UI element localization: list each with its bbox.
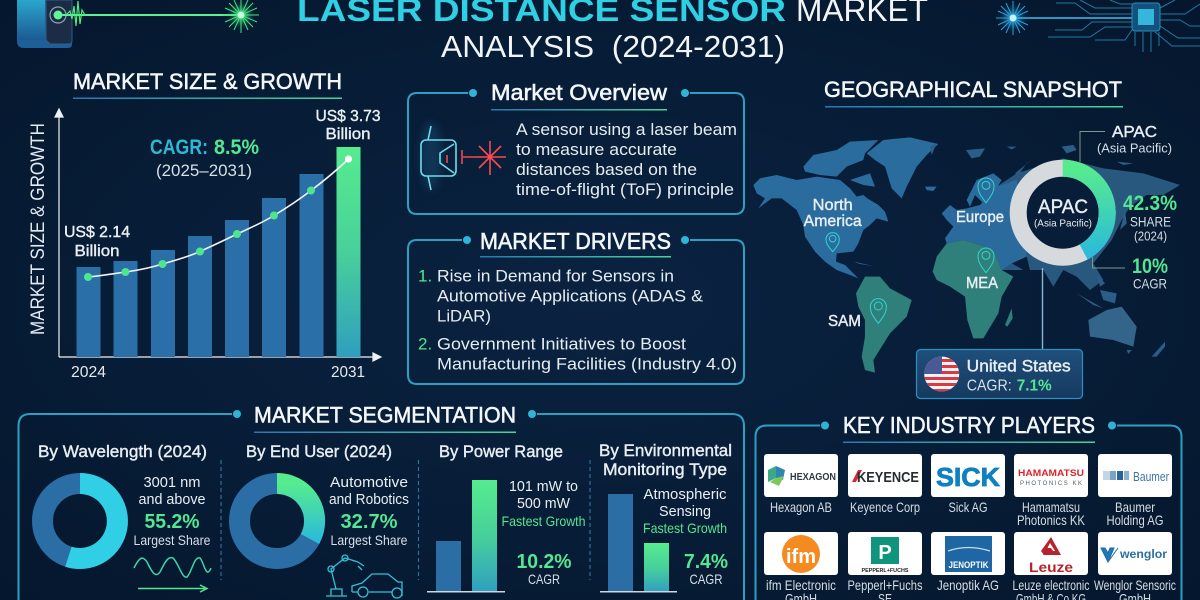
segment: by wavelength: and above: [138, 491, 206, 508]
label: Jenoptik AG: Jenoptik AG: [937, 577, 999, 593]
label: Baumer: [1106, 499, 1164, 528]
icon: robot arm and car: [326, 555, 402, 598]
pins: [826, 178, 994, 323]
driver 1: 1.: [418, 266, 432, 286]
segment: by power range: 500 mW: [517, 495, 571, 512]
logo: Sick: SICK: [936, 462, 1000, 492]
heading: market drivers: MARKET DRIVERS: [480, 228, 671, 254]
driver 1: [418, 266, 704, 326]
donut: wavelength: [42, 484, 118, 558]
text: overview description: A sensor using a laser beam: [516, 120, 737, 139]
label: Baumer: Holding AG: [1106, 512, 1164, 528]
region labels: [804, 197, 1004, 330]
segment: by power range: 101 mW to: [509, 478, 578, 495]
CAGR stat: CAGR: [1133, 276, 1167, 292]
world map: americas: [753, 137, 938, 373]
segment: by environmental monitoring type: Atmospheric: [644, 486, 727, 503]
segment: by wavelength: By Wavelength (2024): [38, 443, 207, 461]
axis years: [71, 364, 365, 381]
callout: United States: 7.1%: [1017, 378, 1052, 394]
logo: Pepperl+Fuchs: [848, 532, 922, 575]
label: Hamamatsu: [1017, 499, 1086, 528]
logo: Pepperl+Fuchs: P: [878, 542, 892, 564]
heading: market segmentation: MARKET SEGMENTATION: [254, 402, 516, 428]
logo: Sick: [931, 454, 1005, 497]
icon: circuit chip with cyan star: [996, 0, 1200, 52]
bar chart: environmental: [600, 494, 677, 592]
label: CAGR: 8.5%: [214, 136, 259, 159]
logo: Pepperl+Fuchs: PEPPERL+FUCHS: [862, 568, 909, 574]
panel: key industry players: [756, 412, 1182, 600]
label: Pepperl+Fuchs: [848, 577, 922, 600]
panel: market size and growth: [28, 69, 381, 381]
segment: by end user: and Robotics: [329, 491, 409, 508]
donut: APAC share: (Asia Pacific): [1034, 218, 1092, 230]
label: Sick AG: Sick AG: [948, 499, 988, 515]
text: overview description: [516, 120, 737, 199]
logo: Keyence: [848, 454, 922, 497]
logo: Hamamatsu: [1014, 454, 1088, 497]
CAGR stat: 10%: [1132, 255, 1168, 278]
logo: Hamamatsu: HAMAMATSU: [1018, 468, 1084, 479]
segment: by environmental monitoring type: Monitoring Type: [603, 461, 727, 479]
panel: market overview: [408, 80, 744, 214]
callout: United States: [916, 350, 1082, 398]
icon: US flag: [924, 356, 960, 392]
donut: APAC share: APAC: [1038, 197, 1088, 218]
label: Leuze electronic: [1012, 577, 1090, 600]
APAC callout: (Asia Pacific): [1097, 140, 1172, 156]
label: 2031 value: Billion: [326, 126, 370, 143]
logo: Leuze: Leuze: [1029, 559, 1073, 575]
share stat: 42.3%: [1123, 192, 1177, 215]
label: 2024 value: US$ 2.14: [64, 224, 130, 241]
segment: by power range: By Power Range: [439, 443, 563, 461]
label: Pepperl+Fuchs: Pepperl+Fuchs: [848, 577, 922, 593]
callout: United States: CAGR:: [967, 378, 1012, 394]
panel: market drivers: [408, 228, 744, 384]
segment: by end user: 32.7%: [340, 511, 398, 533]
heading: market size: MARKET SIZE & GROWTH: [73, 69, 342, 94]
icon: wave and arrow: [134, 558, 211, 592]
segment: by power range: Fastest Growth: [502, 513, 586, 529]
text: overview description: to measure accurate: [516, 140, 677, 159]
label: Hamamatsu: Photonics KK: [1017, 512, 1086, 528]
logo: Baumer: Baumer: [1133, 470, 1169, 484]
label: ifm Electronic: [766, 577, 836, 600]
segment: by end user: Automotive: [330, 474, 408, 491]
title: ANALYSIS (2024-2031): [441, 29, 785, 64]
segment: by environmental monitoring type: 7.4%: [684, 551, 728, 573]
icon: laser sensor with beam: [17, 0, 259, 48]
bar chart: power range: [427, 480, 505, 592]
icon: laser sensor: [420, 122, 506, 190]
label: CAGR: [150, 136, 259, 180]
logo: ifm: [764, 532, 838, 575]
segment: by end user: [240, 443, 409, 598]
region labels: SAM: [828, 313, 861, 330]
logo: Keyence: KEYENCE: [857, 469, 919, 486]
segment: by end user: By End User (2024): [246, 443, 392, 461]
label: 2024 value: Billion: [74, 243, 120, 260]
text: overview description: distances based on the: [516, 160, 697, 179]
segment: by environmental monitoring type: Fastest Growth: [643, 520, 727, 536]
label: Baumer: Baumer: [1115, 499, 1155, 515]
world map: eastern hemisphere: [930, 143, 1180, 357]
APAC callout: APAC: [1112, 124, 1157, 141]
label: Keyence Corp: Keyence Corp: [850, 499, 920, 515]
driver 1: Rise in Demand for Sensors in: [437, 266, 674, 286]
segment: by end user: Largest Share: [330, 532, 408, 548]
share stat: (2024): [1134, 228, 1167, 244]
region labels: North: [813, 197, 853, 214]
CAGR stat: [1132, 255, 1168, 292]
label: Hamamatsu: Hamamatsu: [1022, 499, 1080, 515]
callout: United States: United States: [967, 358, 1071, 376]
logo: Leuze: [1014, 532, 1088, 575]
label: Leuze electronic: Leuze electronic: [1012, 577, 1090, 593]
logo: Hamamatsu: PHOTONICS KK: [1020, 481, 1082, 487]
label: Wenglor Sensoric: [1094, 577, 1176, 600]
segment: by environmental monitoring type: [599, 442, 732, 592]
axis years: 2024: [71, 364, 106, 381]
driver 1: LiDAR): [437, 306, 491, 326]
driver 1: Automotive Applications (ADAS &: [437, 286, 704, 306]
connector lines: [1042, 132, 1125, 349]
label: 2031 value: [316, 108, 381, 143]
label: CAGR: (2025–2031): [156, 162, 252, 180]
share stat: SHARE: [1130, 214, 1171, 230]
segment: by wavelength: 55.2%: [144, 511, 200, 533]
region labels: Europe: [956, 209, 1004, 226]
region labels: America: [804, 213, 862, 230]
driver 2: Government Initiatives to Boost: [437, 334, 686, 354]
title: [297, 0, 928, 64]
label: CAGR: CAGR:: [150, 136, 208, 159]
logo: Hexagon: HEXAGON: [790, 471, 836, 483]
logo: Baumer: [1098, 454, 1172, 497]
heading: key industry players: KEY INDUSTRY PLAYERS: [843, 412, 1095, 438]
panel: market segmentation: [18, 402, 744, 600]
text: overview description: time-of-flight (ToF) principle: [516, 180, 734, 199]
driver 2: 2.: [418, 334, 432, 354]
label: Hexagon AB: Hexagon AB: [770, 499, 832, 515]
region labels: MEA: [966, 275, 999, 292]
bar chart: market size 2024 to 2031: [55, 109, 381, 361]
label: ifm Electronic: ifm Electronic: [766, 577, 836, 593]
share stat: [1123, 192, 1177, 244]
label: 2031 value: US$ 3.73: [316, 108, 381, 125]
logo: ifm: ifm: [786, 546, 816, 568]
logo: Wenglor: wenglor: [1119, 547, 1167, 561]
label: 2024 value: [64, 224, 130, 260]
heading: geographical snapshot: GEOGRAPHICAL SNAPSHOT: [824, 77, 1122, 102]
driver 2: [418, 334, 737, 374]
driver 2: Manufacturing Facilities (Industry 4.0): [437, 354, 737, 374]
logo: Jenoptik: JENOPTIK: [948, 560, 989, 570]
segment: by power range: [427, 443, 586, 592]
donut: APAC share: [1018, 168, 1107, 257]
y axis label: MARKET SIZE & GROWTH: [28, 123, 49, 335]
segment: by power range: 10.2%: [516, 551, 572, 573]
segment: by power range: CAGR: [528, 571, 560, 587]
logo: Hexagon: [764, 454, 838, 497]
logo: Jenoptik: [931, 532, 1005, 575]
segment: by environmental monitoring type: Sensing: [659, 503, 711, 520]
APAC callout: [1097, 124, 1172, 156]
segment: by wavelength: [38, 443, 211, 592]
heading: market overview: Market Overview: [491, 80, 667, 105]
segment: by wavelength: 3001 nm: [144, 474, 200, 491]
segment: by wavelength: Largest Share: [134, 532, 211, 548]
segment: by environmental monitoring type: CAGR: [690, 571, 722, 587]
donut: end user: [240, 483, 315, 558]
segment: by environmental monitoring type: By Environmental: [599, 442, 732, 460]
axis years: 2031: [331, 364, 365, 381]
panel: geographical snapshot: [753, 77, 1180, 398]
logo: Wenglor: [1098, 532, 1172, 575]
